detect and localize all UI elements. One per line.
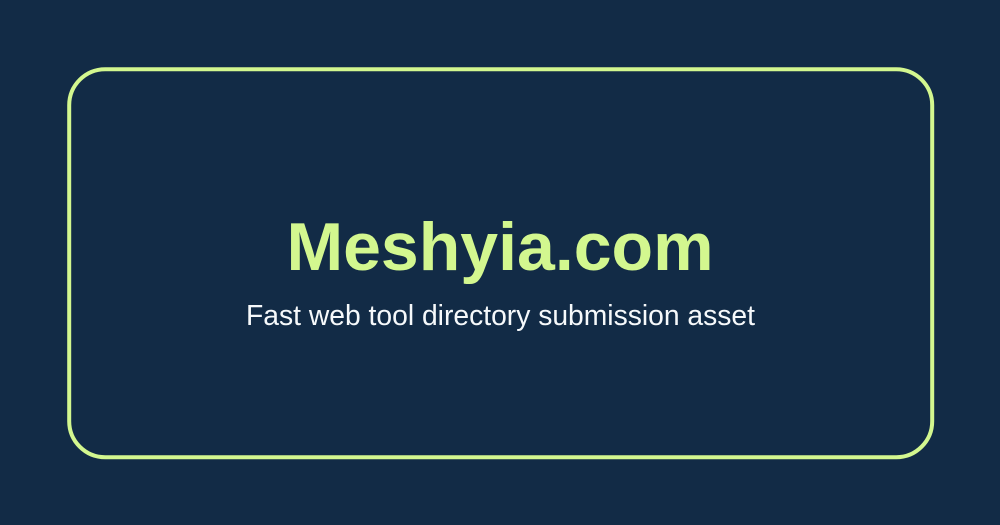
rounded border frame bbox=[69, 69, 932, 457]
subtitle: Fast web tool directory submission asset bbox=[246, 299, 755, 331]
title: Meshyia.com bbox=[286, 209, 714, 285]
